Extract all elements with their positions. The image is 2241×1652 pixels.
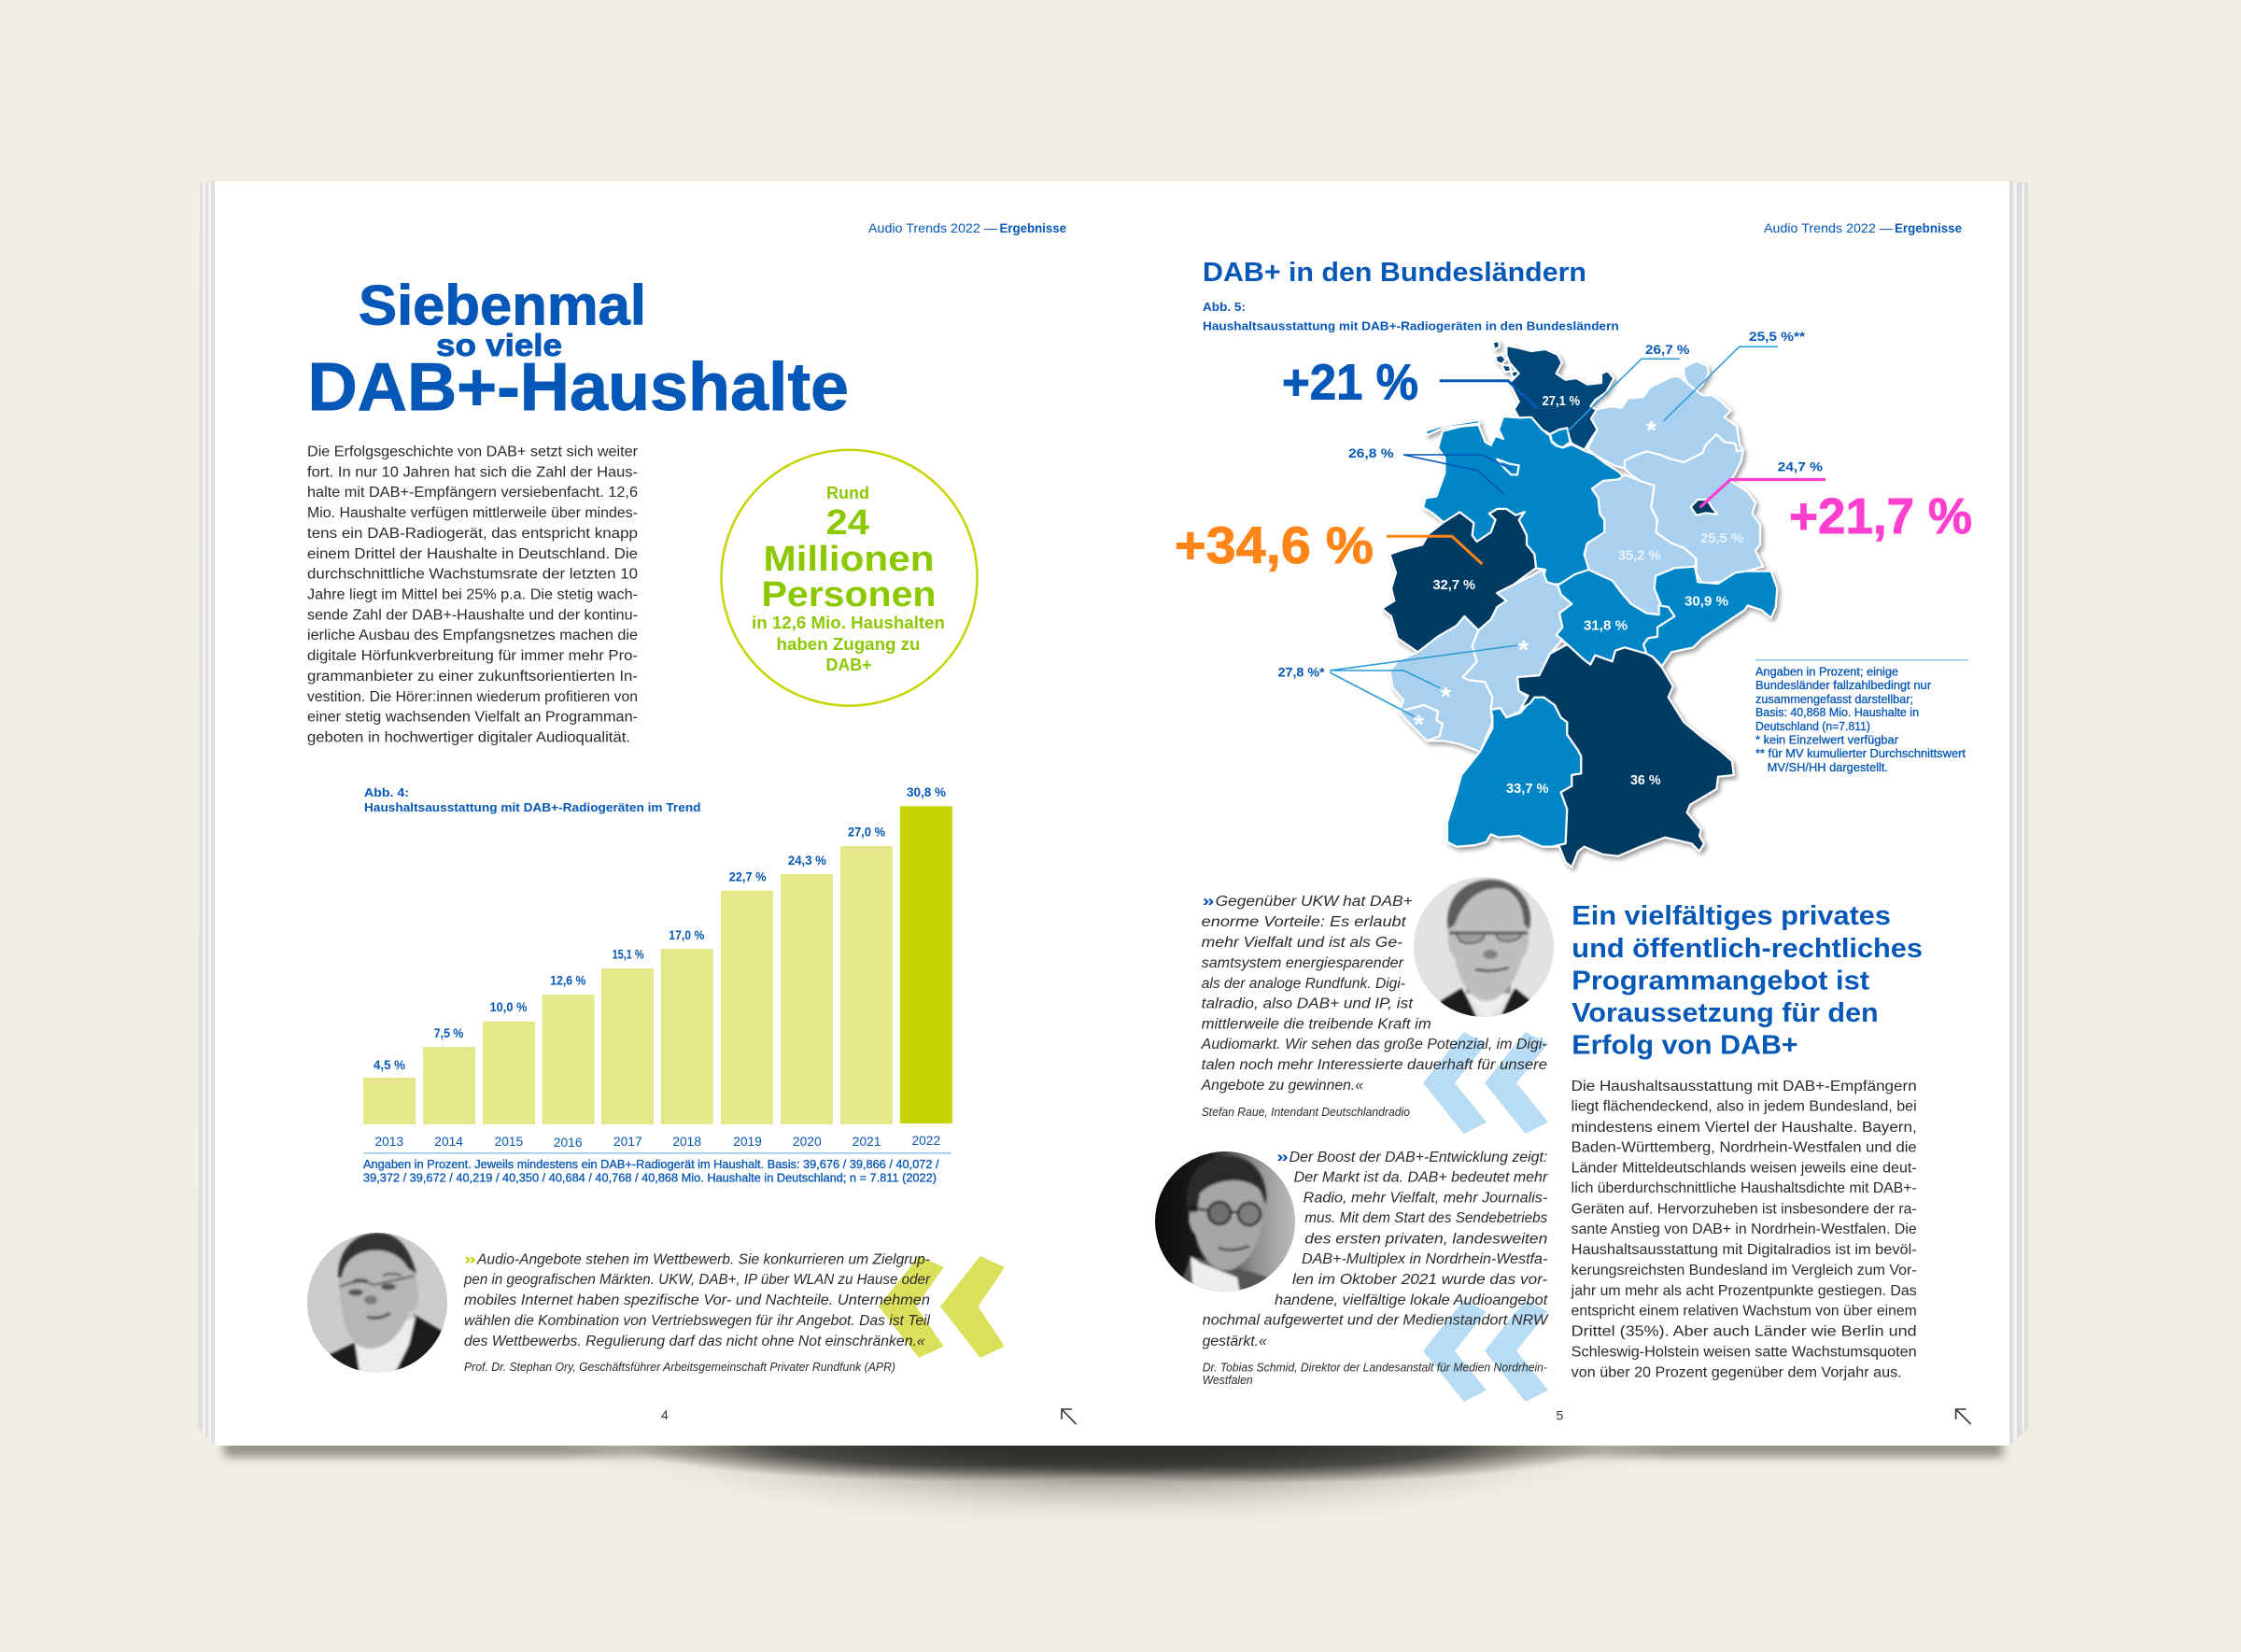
Nordrhein-Westfalen	[1382, 509, 1536, 652]
value labels: 24,3 %	[788, 853, 826, 868]
map outside value labels: 25,5 %**	[1749, 329, 1806, 344]
year axis: 2014	[434, 1134, 463, 1149]
quote text: talradio, also DAB+ und IP, ist	[1202, 996, 1414, 1012]
Thüringen	[1557, 570, 1674, 665]
map caption: Abb. 5: Haushaltsausstattung mit DAB+-Radiogeräten in den Bundesländern	[1203, 319, 1619, 332]
chart footnote: Angaben in Prozent. Jeweils mindestens ein DAB+-Radiogerät im Haushalt. Basis: 39,676 / 39,866 / 40,072 /	[363, 1158, 939, 1171]
article body text: sante Anstieg von DAB+ in Nordrhein-Westfalen. Die	[1572, 1221, 1917, 1237]
article body text	[1571, 1079, 1917, 1380]
icon: corner arrow right page	[1956, 1409, 1971, 1424]
page number 5: 5	[1556, 1408, 1563, 1423]
Mecklenburg-Vorpommern	[1587, 376, 1743, 469]
quote text: Radio, mehr Vielfalt, mehr Journalis-	[1304, 1190, 1547, 1206]
year axis: 2015	[495, 1134, 523, 1149]
quote text: Der Boost der DAB+-Entwicklung zeigt:	[1290, 1150, 1547, 1165]
quote text: talen noch mehr Interessierte dauerhaft für unsere	[1202, 1057, 1547, 1073]
left page header: Ergebnisse	[999, 220, 1066, 235]
year axis: 2019	[733, 1134, 762, 1149]
map state values: 25,5 %	[1700, 530, 1743, 546]
map footnote: ** für MV kumulierter Durchschnittswert	[1755, 747, 1966, 760]
article body text: kerungsreichsten Bundesland im Vergleich zum Vor-	[1572, 1263, 1917, 1278]
growth callout: +34,6 %: +34,6 %	[1175, 515, 1374, 574]
quote text: »	[1276, 1148, 1289, 1165]
quote attribution: Prof. Dr. Stephan Ory, Geschäftsführer Arbeitsgemeinschaft Privater Rundfunk (APR)	[464, 1361, 895, 1374]
bars	[363, 806, 952, 1124]
quote text: als der analoge Rundfunk. Digi-	[1202, 976, 1405, 992]
intro text block: grammanbieter zu einer zukunftsorientierten In-	[307, 669, 638, 685]
article heading: Ein vielfältiges privates	[1572, 901, 1891, 931]
Brandenburg	[1625, 434, 1763, 584]
quote text: mehr Vielfalt und ist als Ge-	[1202, 935, 1402, 951]
article body text: Länder Mitteldeutschlands weisen jeweils eine deut-	[1572, 1160, 1917, 1176]
quote text: »	[464, 1250, 476, 1267]
quote: Tobias Schmid	[1155, 1148, 1549, 1402]
article heading	[1572, 901, 1923, 1061]
magazine shadow	[224, 1360, 2003, 1532]
bar chart: Abb. 4	[363, 784, 952, 1185]
chart footnote	[363, 1158, 939, 1185]
magazine page spread	[215, 181, 2009, 1446]
right page header: Ergebnisse	[1895, 220, 1962, 235]
Hessen	[1463, 570, 1572, 717]
intro text block: Jahre liegt im Mittel bei 25% p.a. Die stetig wach-	[307, 586, 638, 603]
intro text block: vestition. Die Hörer:innen wiederum profitieren von	[307, 689, 638, 705]
value labels: 10,0 %	[489, 999, 528, 1014]
title: so viele	[436, 328, 562, 362]
quote attribution	[1203, 1362, 1547, 1387]
quote text	[1203, 1148, 1549, 1349]
intro text block: Die Erfolgsgeschichte von DAB+ setzt sich weiter	[307, 445, 638, 459]
Bayern	[1517, 644, 1734, 867]
right page header	[1764, 220, 1962, 235]
year axis	[375, 1133, 940, 1150]
map asterisks: *	[1414, 710, 1424, 739]
article body text: Baden-Württemberg, Nordrhein-Westfalen und die	[1572, 1140, 1917, 1156]
Schleswig-Holstein	[1506, 346, 1614, 450]
article body text: entspricht einem relativen Wachstum von über einem	[1572, 1304, 1917, 1320]
quote attribution: Westfalen	[1203, 1374, 1253, 1387]
value labels: 17,0 %	[669, 927, 705, 942]
year axis: 2016	[554, 1135, 583, 1150]
map state values: 27,1 %	[1543, 393, 1580, 409]
map outside value labels	[1278, 329, 1824, 680]
map state values: 32,7 %	[1432, 577, 1475, 593]
Sachsen	[1643, 567, 1777, 666]
Bremen	[1497, 459, 1519, 474]
intro text block: digitale Hörfunkverbreitung für immer mehr Pro-	[307, 648, 638, 664]
quote text: mittlerweile die treibende Kraft im	[1202, 1016, 1431, 1033]
quote text: des ersten privaten, landesweiten	[1304, 1231, 1547, 1248]
portrait: Tobias Schmid	[1155, 1151, 1295, 1293]
Hamburg	[1550, 428, 1571, 447]
chevrons: blue quote mark	[1423, 1032, 1548, 1134]
quote text: des Wettbewerbs. Regulierung darf das nicht ohne Not einschränken.«	[464, 1334, 925, 1349]
value labels	[374, 784, 947, 1072]
quote text: Gegenüber UKW hat DAB+	[1216, 894, 1413, 910]
map outside value labels: 27,8 %*	[1278, 665, 1325, 680]
Rügen	[1684, 361, 1709, 390]
value labels: 4,5 %	[374, 1057, 406, 1072]
intro text block: einer stetig wachsenden Vielfalt an Programman-	[307, 710, 638, 726]
callout circle: 24 Millionen Personen: 24	[825, 503, 869, 543]
map caption: Abb. 5	[1203, 300, 1619, 332]
map footnote: Bundesländer fallzahlbedingt nur	[1755, 679, 1931, 692]
map asterisks: *	[1646, 416, 1656, 445]
map asterisks	[1414, 416, 1656, 739]
callout circle: 24 Millionen Personen	[721, 450, 977, 706]
intro text block: halte mit DAB+-Empfängern versiebenfacht. 12,6	[307, 485, 638, 501]
map footnote: MV/SH/HH dargestellt.	[1768, 761, 1888, 774]
chart heading	[364, 785, 701, 814]
map footnote: Deutschland (n=7.811)	[1755, 720, 1870, 733]
quote text: wählen die Kombination von Vertriebswegen für ihr Angebot. Das ist Teil	[464, 1313, 931, 1329]
year axis: 2013	[375, 1134, 403, 1149]
map footnote: Basis: 40,868 Mio. Haushalte in	[1755, 706, 1919, 719]
article heading: Programmangebot ist	[1572, 967, 1869, 996]
value labels: 27,0 %	[848, 825, 885, 840]
quote text: samtsystem energiesparender	[1202, 955, 1404, 971]
value labels: 22,7 %	[729, 869, 767, 884]
map heading: DAB+ in den Bundesländern	[1203, 258, 1586, 288]
map asterisks: *	[1518, 635, 1529, 664]
article body text: lich überdurchschnittliche Haushaltsdichte mit DAB+-	[1572, 1180, 1917, 1196]
intro text block: geboten in hochwertiger digitaler Audioqualität.	[307, 730, 630, 745]
map state values: 31,8 %	[1584, 618, 1628, 633]
Sachsen-Anhalt	[1585, 474, 1697, 614]
value labels: 30,8 %	[907, 784, 947, 799]
growth callout: +21 %: +21 %	[1282, 354, 1418, 410]
map state values	[1432, 393, 1743, 797]
quote attribution: Stefan Raue, Intendant Deutschlandradio	[1202, 1106, 1410, 1119]
article body text: Drittel (35%). Aber auch Länder wie Berlin und	[1572, 1324, 1917, 1340]
year axis: 2020	[793, 1134, 822, 1149]
Berlin	[1691, 500, 1717, 515]
chart footnote: 39,372 / 39,672 / 40,219 / 40,350 / 40,684 / 40,768 / 40,868 Mio. Haushalte in Deutschland; n = 7.811 (2022)	[363, 1172, 937, 1185]
callout circle: 24 Millionen Personen: DAB+	[825, 655, 872, 674]
icon: corner arrow left page	[1062, 1409, 1076, 1424]
title: DAB+-Haushalte	[308, 350, 849, 425]
map state values: 33,7 %	[1506, 781, 1548, 797]
quote text: mobiles Internet haben spezifische Vor- und Nachteile. Unternehmen	[464, 1292, 930, 1308]
map footnote: zusammengefasst darstellbar;	[1755, 693, 1913, 706]
map state values: 35,2 %	[1618, 548, 1660, 564]
quote text: Der Markt ist da. DAB+ bedeutet mehr	[1294, 1170, 1548, 1186]
leader lines	[1330, 346, 1825, 716]
quote text	[463, 1250, 931, 1349]
quote text: DAB+-Multiplex in Nordrhein-Westfa-	[1302, 1251, 1547, 1267]
growth callout: +21,7 %: +21,7 %	[1789, 488, 1972, 544]
quote text: Audio-Angebote stehen im Wettbewerb. Sie konkurrieren um Zielgrup-	[476, 1251, 930, 1267]
intro text block: tens ein DAB-Radiogerät, das entspricht knapp	[307, 526, 638, 542]
article body text: mindestens einem Viertel der Haushalte. Bayern,	[1572, 1120, 1917, 1136]
intro text block	[307, 445, 638, 745]
Baden-Württemberg	[1447, 698, 1581, 847]
quote text: Angebote zu gewinnen.«	[1201, 1078, 1363, 1094]
intro text block: fort. In nur 10 Jahren hat sich die Zahl der Haus-	[307, 464, 638, 480]
intro text block: einem Drittel der Haushalte in Deutschland. Die	[307, 546, 638, 562]
callout circle: 24 Millionen Personen: haben Zugang zu	[777, 634, 921, 654]
quote: Stefan Raue	[1201, 877, 1554, 1134]
page number 4: 4	[661, 1407, 669, 1422]
callout circle: 24 Millionen Personen: Rund	[826, 483, 869, 502]
map outside value labels: 26,7 %	[1645, 342, 1690, 357]
quote text: nochmal aufgewertet und der Medienstandort NRW	[1203, 1313, 1549, 1329]
left page header: Audio Trends 2022 —	[868, 220, 997, 235]
chart heading: Abb. 4:	[364, 785, 409, 799]
map footnote: * kein Einzelwert verfügbar	[1755, 734, 1898, 747]
intro text block: ierliche Ausbau des Empfangsnetzes machen die	[307, 628, 638, 643]
quote text	[1201, 892, 1547, 1094]
year axis: 2018	[672, 1134, 701, 1149]
title	[308, 275, 849, 425]
map of Germany	[1382, 341, 1777, 867]
portrait: Stephan Ory	[307, 1233, 447, 1377]
North Sea islands	[1496, 355, 1506, 364]
quote text: enorme Vorteile: Es erlaubt	[1202, 914, 1407, 930]
article heading: Voraussetzung für den	[1572, 998, 1879, 1028]
map state values: 30,9 %	[1684, 594, 1728, 610]
quote text: pen in geografischen Märkten. UKW, DAB+, IP über WLAN zu Hause oder	[463, 1272, 931, 1288]
year axis: 2022	[911, 1133, 940, 1148]
quote text: gestärkt.«	[1203, 1334, 1267, 1349]
right page header: Audio Trends 2022 —	[1764, 220, 1893, 235]
article body text: Haushaltsausstattung mit Digitalradios ist im bevöl-	[1572, 1242, 1917, 1258]
value labels: 15,1 %	[613, 947, 644, 962]
article heading: und öffentlich-rechtliches	[1572, 934, 1923, 964]
quote text: mus. Mit dem Start des Sendebetriebs	[1304, 1210, 1548, 1226]
quote attribution: Dr. Tobias Schmid, Direktor der Landesanstalt für Medien Nordrhein-	[1203, 1362, 1547, 1375]
chevrons: yellow quote mark	[879, 1256, 1005, 1358]
quote text: »	[1203, 892, 1215, 910]
Niedersachsen	[1423, 417, 1623, 586]
map outside value labels: 26,8 %	[1348, 445, 1394, 460]
quote text: Audiomarkt. Wir sehen das große Potenzial, im Digi-	[1201, 1037, 1547, 1052]
intro text block: durchschnittliche Wachstumsrate der letzten 10	[307, 567, 638, 583]
chart heading: Haushaltsausstattung mit DAB+-Radiogeräten im Trend	[364, 800, 701, 814]
portrait: Stefan Raue	[1414, 877, 1554, 1020]
intro text block: Mio. Haushalte verfügen mittlerweile über mindes-	[307, 505, 638, 521]
quote: Stephan Ory	[307, 1233, 1005, 1377]
callout circle: 24 Millionen Personen: Personen	[762, 575, 936, 614]
map caption: Abb. 5: Abb. 5:	[1203, 300, 1246, 314]
left page header	[868, 220, 1066, 235]
article body text: von über 20 Prozent gegenüber dem Vorjahr aus.	[1572, 1364, 1902, 1380]
Rheinland-Pfalz	[1389, 616, 1492, 752]
value labels: 12,6 %	[550, 973, 586, 988]
article body text: Die Haushaltsausstattung mit DAB+-Empfängern	[1572, 1079, 1917, 1094]
map footnote: Angaben in Prozent; einige	[1755, 666, 1898, 679]
map footnote	[1755, 659, 1968, 774]
callout circle: 24 Millionen Personen: Millionen	[764, 540, 934, 579]
title: Siebenmal	[359, 275, 646, 336]
Saarland	[1399, 705, 1443, 741]
chevrons: blue quote mark	[1423, 1300, 1548, 1402]
article body text: Geräten auf. Hervorzuheben ist insbesondere der ra-	[1572, 1201, 1917, 1217]
page stack edges	[198, 180, 2028, 1446]
intro text block: sende Zahl der DAB+-Haushalte und der kontinu-	[307, 607, 638, 623]
map outside value labels: 24,7 %	[1778, 459, 1824, 474]
article body text: Schleswig-Holstein weisen satte Wachstumsquoten	[1572, 1345, 1917, 1360]
map state values: 36 %	[1630, 772, 1660, 788]
quote text: len im Oktober 2021 wurde das vor-	[1292, 1272, 1547, 1288]
year axis: 2017	[613, 1134, 642, 1149]
article body text: liegt flächendeckend, also in jedem Bundesland, bei	[1572, 1099, 1917, 1115]
value labels: 7,5 %	[434, 1025, 464, 1040]
map asterisks: *	[1441, 682, 1451, 711]
article heading: Erfolg von DAB+	[1572, 1031, 1798, 1061]
quote text: handene, vielfältige lokale Audioangebot	[1275, 1292, 1548, 1308]
article body text: jahr um mehr als acht Prozentpunkte gestiegen. Das	[1571, 1283, 1917, 1299]
year axis: 2021	[853, 1134, 881, 1149]
callout circle: 24 Millionen Personen: in 12,6 Mio. Haushalten	[752, 613, 945, 632]
